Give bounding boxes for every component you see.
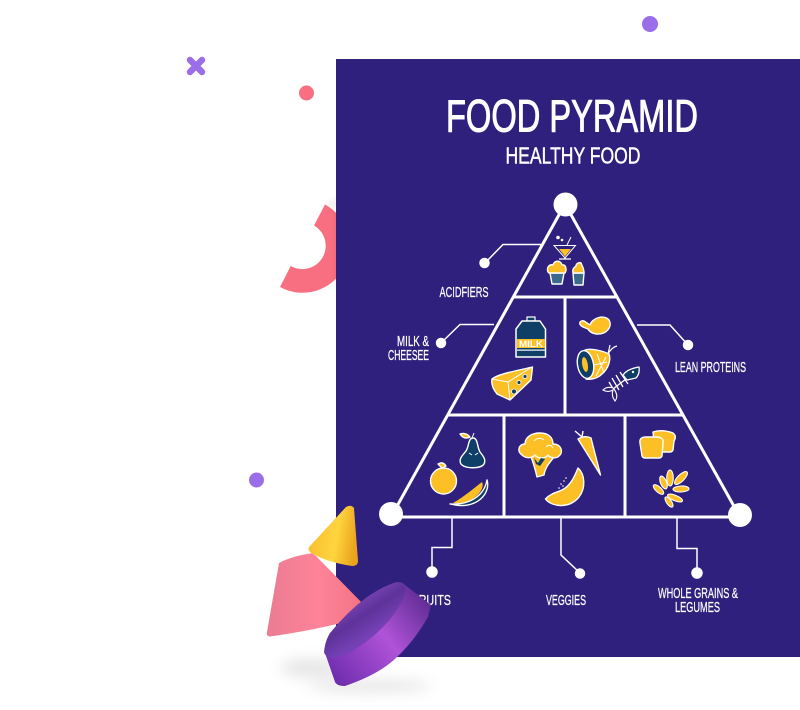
icon: wheat <box>652 470 689 508</box>
icon: milk carton: MILK <box>519 339 544 349</box>
connector: milk and cheese <box>436 324 494 348</box>
decoration: purple dot left <box>249 472 264 488</box>
icon: fish bones <box>603 367 639 401</box>
decoration: red dot <box>299 86 314 100</box>
shape: pink cone <box>267 553 370 636</box>
connector: whole grains <box>677 517 702 578</box>
label: lean proteins: LEAN PROTEINS <box>675 360 746 376</box>
shape: yellow cone <box>308 506 358 566</box>
icon: ham <box>575 345 617 380</box>
icon: orange <box>430 463 456 494</box>
decoration: purple dot top <box>642 16 658 32</box>
label: whole grains and legumes <box>658 586 738 616</box>
label: milk and cheese: CHEESEE <box>388 348 429 364</box>
label: veggies: VEGGIES <box>546 593 586 609</box>
icon: milk carton <box>516 317 546 357</box>
shape: purple disc <box>324 582 431 686</box>
icon: muffin <box>547 261 566 284</box>
connector: veggies <box>561 517 584 578</box>
label: milk and cheese: MILK & <box>397 334 429 350</box>
icon: broccoli <box>519 433 561 477</box>
connector: lean proteins <box>637 325 692 350</box>
pyramid vertex: left <box>379 502 403 526</box>
label: fruits: FRUITS <box>412 593 451 609</box>
pyramid vertex: right <box>728 503 752 527</box>
decoration: red ring segment <box>280 199 352 293</box>
pyramid frame <box>391 204 740 517</box>
label: milk and cheese <box>388 334 429 364</box>
panel: navy poster <box>336 59 800 657</box>
icon: bread <box>640 431 675 458</box>
icon: carrot <box>575 431 600 475</box>
icon: watermelon <box>450 480 488 506</box>
icon: cheese <box>492 367 532 400</box>
icon: ice cream <box>573 263 584 285</box>
icon: chicken leg <box>580 317 610 334</box>
label: whole grains and legumes: LEGUMES <box>675 600 720 616</box>
shape shadow <box>280 659 432 691</box>
connector: acidfiers <box>480 244 541 268</box>
subtitle: HEALTHY FOOD <box>506 142 640 168</box>
icon: martini <box>554 236 576 259</box>
pyramid vertex: top <box>554 192 578 216</box>
label: whole grains and legumes: WHOLE GRAINS & <box>658 586 738 602</box>
decoration: purple cross <box>190 60 202 72</box>
title: FOOD PYRAMID <box>446 90 698 142</box>
connector: fruits <box>427 517 452 577</box>
icon: pear <box>460 433 485 468</box>
icon: melon slice <box>546 468 584 506</box>
label: acidfiers: ACIDFIERS <box>440 285 488 301</box>
